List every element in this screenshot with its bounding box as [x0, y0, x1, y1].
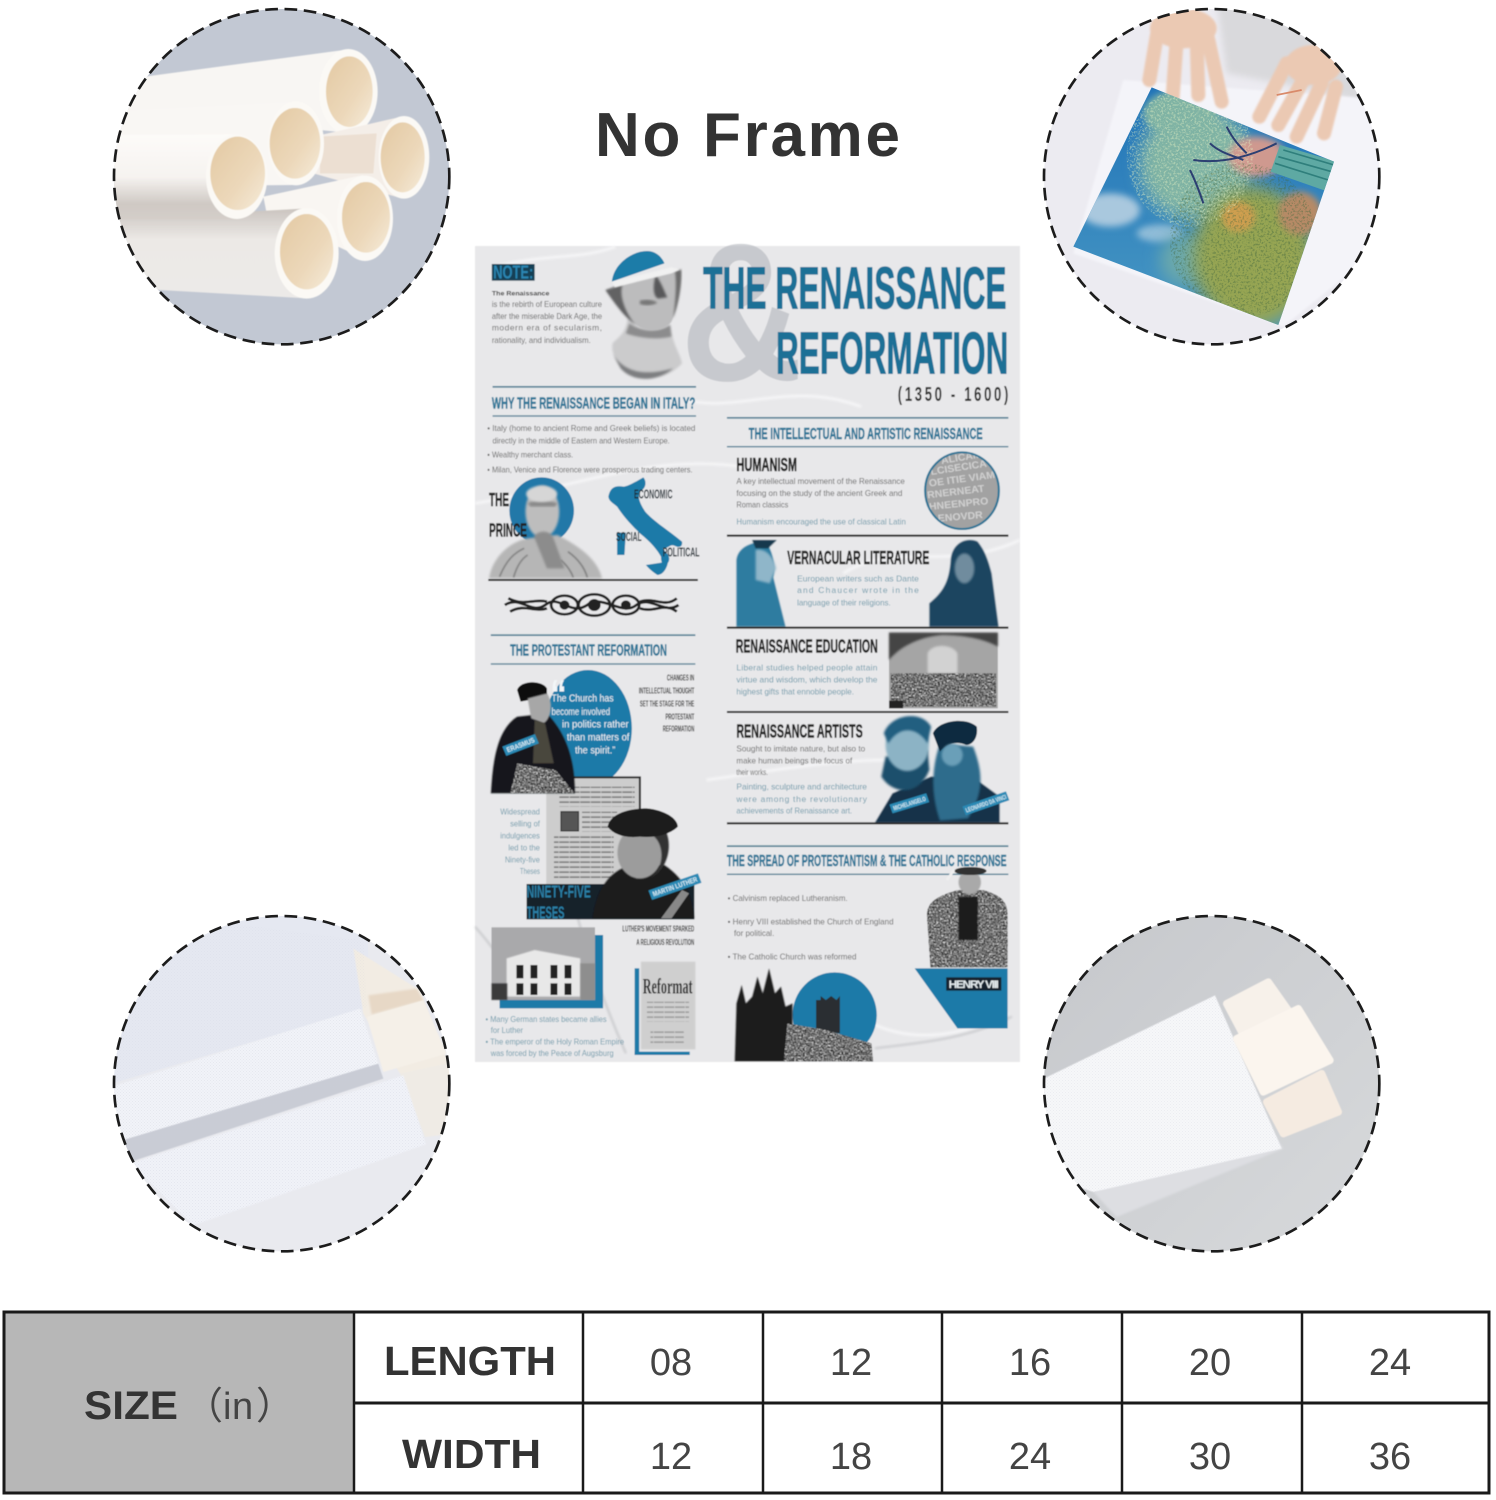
block: humanism: Roman classics [736, 501, 788, 510]
photo circle: rolled canvas on tubes [112, 914, 451, 1253]
note block: NOTE: [493, 263, 533, 283]
panel: intellectual and artistic Renaissance [727, 417, 1008, 629]
image: printed document: Reformat [643, 974, 693, 998]
text: changes in thought: SET THE STAGE FOR THE [640, 700, 695, 709]
heading: why Italy: WHY THE RENAISSANCE BEGAN IN ITALY? [492, 395, 695, 412]
table: length values: 20 [1189, 1342, 1231, 1384]
image: The Prince portrait: PRINCE [489, 521, 527, 542]
note block [492, 263, 602, 345]
image: The Prince portrait [489, 477, 602, 578]
text: reasons: • Italy (home to ancient Rome and Greek beliefs) is located [487, 424, 696, 433]
heading: spread of Protestantism: THE SPREAD OF PROTESTANTISM & THE CATHOLIC RESPONSE [727, 852, 1007, 870]
block: humanism: focusing on the study of the ancient Greek and [736, 489, 903, 498]
table: length values: 12 [830, 1342, 872, 1384]
table: width values: 30 [1189, 1436, 1231, 1478]
panel: Renaissance artists: Sought to imitate nature, but also to [736, 745, 866, 754]
table: row labels [384, 1338, 556, 1477]
image: Wittenberg building [491, 927, 603, 1008]
image: Henry VIII [915, 867, 1008, 1028]
image: inscribed stone: HNEENPRO [929, 496, 989, 513]
table: row labels: LENGTH [384, 1338, 556, 1384]
quote bubble [544, 670, 632, 787]
text: spread bullets: for political. [734, 929, 774, 938]
table: width values: 24 [1009, 1436, 1051, 1478]
image: cathedral [735, 968, 877, 1062]
panel: spread of Protestantism [727, 845, 1008, 1062]
banner: Ninety-Five Theses: THESES [527, 902, 564, 923]
map: Italy: SOCIAL [616, 529, 642, 544]
image: The Prince portrait: THE [489, 490, 509, 511]
ornament [505, 594, 679, 616]
photo circle: stacked white tubes [112, 8, 451, 346]
panel: Protestant Reformation [486, 634, 702, 1058]
image: theses page [546, 777, 640, 884]
table: width values: 18 [830, 1436, 872, 1478]
image: inscribed stone: ENOVDR [937, 510, 984, 525]
text: German states: • The emperor of the Holy Roman Empire [486, 1038, 625, 1046]
panel: Renaissance poster [475, 202, 1020, 1062]
panel: Renaissance artists: RENAISSANCE ARTISTS [736, 722, 863, 743]
text: spread bullets: • The Catholic Church was reformed [728, 953, 857, 961]
block: vernacular literature: European writers such as Dante [797, 575, 919, 583]
text: indulgences: Theses [520, 867, 540, 876]
table: width values: 12 [650, 1436, 692, 1478]
text: indulgences [500, 808, 541, 876]
panel: Renaissance education [727, 633, 1008, 713]
image: inscribed stone: LCISECICA [930, 459, 988, 478]
panel: Renaissance artists: were among the revolutionary [735, 795, 868, 804]
panel: Renaissance artists: their works. [736, 768, 768, 777]
text: Luther's movement [622, 925, 694, 947]
panel: Renaissance education: RENAISSANCE EDUCATION [736, 637, 878, 658]
table: grey size cell: （in） [185, 1386, 294, 1428]
heading: intellectual and artistic: THE INTELLECTUAL AND ARTISTIC RENAISSANCE [749, 425, 983, 443]
panel: Renaissance artists: make human beings the focus of [736, 757, 853, 765]
panel: Renaissance education: Liberal studies helped people attain [736, 664, 878, 672]
note block: is the rebirth of European culture [492, 300, 602, 309]
text: indulgences: selling of [510, 820, 541, 829]
panel: Renaissance education: highest gifts that ennoble people. [736, 688, 854, 697]
table: width values [650, 1436, 1411, 1478]
note block: rationality, and individualism. [492, 336, 591, 345]
image: Henry VIII: HENRY VIII [949, 978, 999, 991]
table: grid lines [4, 1312, 1489, 1493]
image: inscribed stone: OE ITIE VIAM [928, 470, 996, 490]
image: classical bust with blue cap [606, 251, 682, 379]
text: changes in thought [639, 674, 695, 734]
text: changes in thought: PROTESTANT [666, 713, 694, 721]
text: spread bullets [728, 894, 894, 961]
heading: Protestant Reformation: THE PROTESTANT REFORMATION [510, 642, 667, 660]
panel: Renaissance artists [727, 716, 1009, 824]
quote bubble: than matters of [567, 733, 630, 744]
block: vernacular literature: VERNACULAR LITERATURE [787, 548, 930, 569]
ampersand graphic: & [680, 202, 803, 422]
image: Michelangelo and Leonardo: MICHELANGELO [893, 796, 927, 812]
table: grey size cell [4, 1312, 353, 1493]
text: German states [486, 1015, 625, 1058]
image: Chaucer [929, 540, 999, 627]
table: length values: 08 [650, 1342, 692, 1384]
banner: Ninety-Five Theses [527, 881, 694, 923]
panel: Renaissance education: virtue and wisdom, which develop the [736, 676, 878, 685]
text: reasons [487, 424, 696, 475]
text: Luther's movement: A RELIGIOUS REVOLUTION [636, 938, 694, 947]
panel: Renaissance poster: POLITICAL [663, 545, 700, 560]
text: indulgences: indulgences [500, 832, 540, 840]
text: German states: for Luther [491, 1026, 523, 1035]
text: spread bullets: • Calvinism replaced Lutheranism. [728, 894, 848, 903]
map: Italy [608, 477, 700, 575]
block: vernacular literature: and Chaucer wrote in the [797, 586, 919, 595]
text: changes in thought: INTELLECTUAL THOUGHT [639, 687, 694, 695]
quote bubble: in politics rather [562, 720, 629, 731]
image: inscribed stone [925, 450, 999, 529]
table: length values [650, 1342, 1411, 1384]
quote bubble: “ [550, 671, 567, 716]
table: length values: 24 [1369, 1342, 1411, 1384]
text: spread bullets: • Henry VIII established the Church of England [728, 918, 894, 926]
map: Italy: ECONOMIC [634, 487, 673, 501]
image: Martin Luther [593, 808, 702, 918]
note block: The Renaissance [492, 290, 550, 297]
title: The Renaissance and Reformation: REFORMATION [776, 320, 1008, 386]
image: Dante [736, 540, 786, 627]
size table [4, 1312, 1489, 1493]
title: The Renaissance and Reformation [703, 255, 1008, 406]
note block: modern era of secularism, [492, 324, 602, 333]
title: The Renaissance and Reformation: (1350 - 1600) [898, 383, 1008, 406]
block: humanism: HUMANISM [736, 455, 797, 476]
heading: No Frame: No Frame [595, 101, 900, 170]
text: German states: • Many German states became allies [486, 1015, 607, 1024]
block: vernacular literature [736, 540, 999, 627]
title: The Renaissance and Reformation: THE RENAISSANCE [703, 255, 1007, 321]
note block: after the miserable Dark Age, the [492, 312, 602, 321]
quote bubble: the spirit.” [575, 746, 615, 756]
text: Luther's movement: LUTHER'S MOVEMENT SPARKED [622, 925, 694, 934]
text: reasons: directly in the middle of Eastern and Western Europe. [493, 437, 670, 446]
image: School of Athens [889, 633, 998, 708]
block: humanism: A key intellectual movement of the Renaissance [736, 477, 905, 486]
panel: Renaissance artists: Painting, sculpture and architecture [736, 783, 867, 792]
banner: Ninety-Five Theses: NINETY-FIVE [527, 881, 591, 902]
text: indulgences: Widespread [500, 808, 540, 816]
table: row labels: WIDTH [402, 1431, 541, 1477]
text: indulgences: led to the [508, 844, 540, 853]
panel: why the Renaissance began in Italy [487, 386, 700, 616]
image: Michelangelo and Leonardo: LEONARDO DA VINCI [965, 794, 1008, 814]
text: indulgences: Ninety-five [505, 856, 540, 864]
table: length values: 16 [1009, 1342, 1051, 1384]
block: humanism: Humanism encouraged the use of classical Latin [736, 518, 906, 526]
photo circle: hands holding canvas print [1042, 8, 1381, 346]
block: vernacular literature: language of their religions. [797, 599, 891, 607]
quote bubble: The Church has [551, 694, 614, 705]
text: reasons: • Wealthy merchant class. [487, 451, 573, 460]
image: Erasmus: ERASMUS [506, 736, 536, 754]
table: grey size cell: SIZE [84, 1384, 178, 1428]
block: humanism [736, 455, 906, 526]
quote bubble: become involved [551, 707, 610, 718]
image: inscribed stone: ALICAM [940, 450, 982, 467]
text: changes in thought: REFORMATION [663, 725, 694, 734]
image: Erasmus [491, 682, 575, 793]
table: width values: 36 [1369, 1436, 1411, 1478]
photo circle: rolled canvas end view [1042, 914, 1381, 1253]
image: Martin Luther: MARTIN LUTHER [652, 876, 699, 898]
image: Michelangelo and Leonardo [875, 716, 1009, 823]
text: German states: was forced by the Peace of Augsburg [490, 1049, 614, 1058]
image: printed document [635, 962, 695, 1055]
image: inscribed stone: RNERNEAT [927, 484, 986, 501]
text: changes in thought: CHANGES IN [667, 674, 694, 683]
panel: Renaissance artists: achievements of Renaissance art. [736, 807, 852, 816]
text: reasons: • Milan, Venice and Florence were prosperous trading centers. [487, 466, 693, 475]
